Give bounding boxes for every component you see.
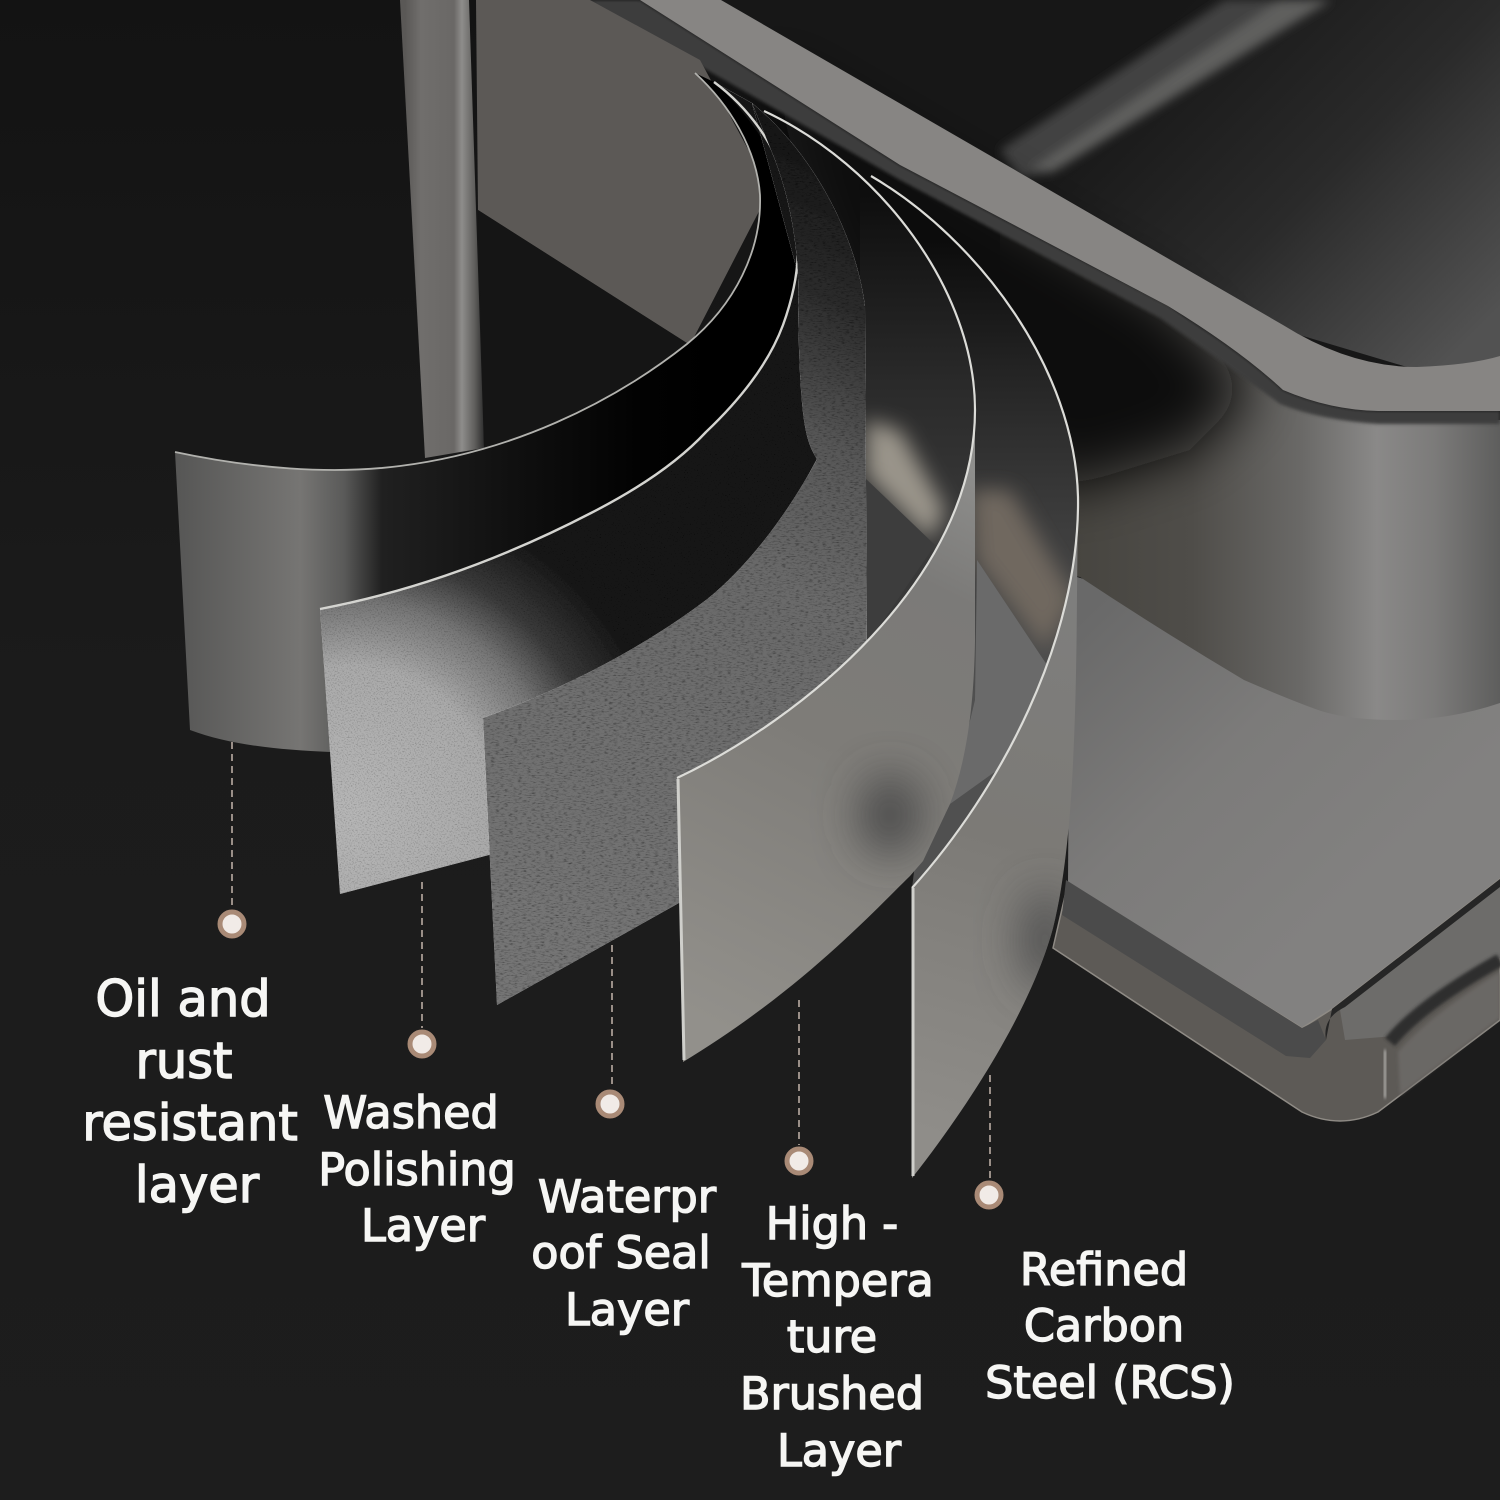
layer 1 top edge	[175, 73, 760, 470]
callout: refined carbon steel: Refined	[1020, 1245, 1188, 1296]
grey shadow	[866, 479, 932, 543]
callout: washed polishing layer: Washed	[323, 1088, 499, 1139]
layer 4 left edge	[678, 779, 684, 1060]
tray outer base rim	[1053, 879, 1500, 1121]
layer 4: high temperature brushed	[677, 111, 975, 1062]
layer 2 top edge	[320, 82, 798, 609]
layer 4 top edge	[677, 111, 975, 778]
callout: high-temperature brushed layer: Tempera	[741, 1256, 934, 1307]
tray rim	[640, 0, 1500, 411]
wall shadow under rim	[760, 60, 1250, 490]
callout: refined carbon steel: Carbon	[1024, 1301, 1184, 1352]
callout: washed polishing layer: Polishing	[318, 1145, 516, 1196]
callout: oil and rust resistant layer: rust	[136, 1032, 232, 1090]
callout: waterproof seal layer: oof Seal	[531, 1228, 711, 1279]
tray floor	[1068, 575, 1500, 1028]
callout: oil and rust resistant layer	[82, 742, 298, 1214]
callout: waterproof seal layer: Layer	[565, 1285, 690, 1336]
tray inner shadow recess	[478, 210, 690, 447]
layer 4 dark blob	[860, 775, 920, 855]
back of layer 4	[860, 235, 959, 640]
callout: washed polishing layer: Layer	[361, 1201, 486, 1252]
callout: refined carbon steel	[977, 1075, 1235, 1409]
tray interior	[721, 0, 1500, 370]
tan reflection	[866, 420, 945, 540]
callout: refined carbon steel: Steel (RCS)	[985, 1358, 1235, 1409]
callout: high-temperature brushed layer: Brushed	[740, 1369, 924, 1420]
layer 3: waterproof seal brushed texture	[483, 103, 867, 1005]
layer 5 left edge	[912, 888, 914, 1176]
callout: washed polishing layer	[318, 882, 516, 1252]
callout: waterproof seal layer	[531, 945, 717, 1336]
callout: high-temperature brushed layer	[740, 1000, 934, 1477]
tray divider bar	[1000, 0, 1332, 178]
tray post	[400, 0, 484, 458]
layer 5 dark blob	[1021, 890, 1069, 990]
callout: waterproof seal layer: Waterpr	[538, 1172, 717, 1223]
layer 5 top edge	[871, 176, 1078, 888]
tray right rim face	[1340, 886, 1500, 1040]
back of layer 5	[912, 290, 1076, 886]
callout: oil and rust resistant layer: Oil and	[95, 970, 271, 1028]
tan reflection	[970, 490, 1075, 650]
callout: high-temperature brushed layer: ture	[787, 1312, 877, 1363]
layer 1: oil and rust resistant	[175, 73, 805, 752]
layer 5: refined carbon steel	[871, 176, 1078, 1178]
callout: high-temperature brushed layer: High -	[766, 1199, 898, 1250]
tray base dark lip	[1062, 880, 1326, 1058]
tray right rim shadow	[1390, 960, 1500, 1042]
tray: product photo	[400, 0, 1500, 1121]
callout: high-temperature brushed layer: Layer	[777, 1426, 902, 1477]
callout: oil and rust resistant layer: resistant	[82, 1094, 298, 1152]
layer 2: washed polishing	[320, 82, 817, 894]
tray back wall	[476, 0, 770, 345]
grey reflection	[950, 560, 1047, 804]
callout: oil and rust resistant layer: layer	[135, 1156, 260, 1214]
tray right lip	[1325, 879, 1500, 1040]
tray rim bevel	[584, 0, 1500, 424]
tray lower rim band	[1398, 972, 1500, 1095]
tray corner highlight	[1384, 1050, 1386, 1098]
tray outer wall	[1000, 220, 1500, 720]
